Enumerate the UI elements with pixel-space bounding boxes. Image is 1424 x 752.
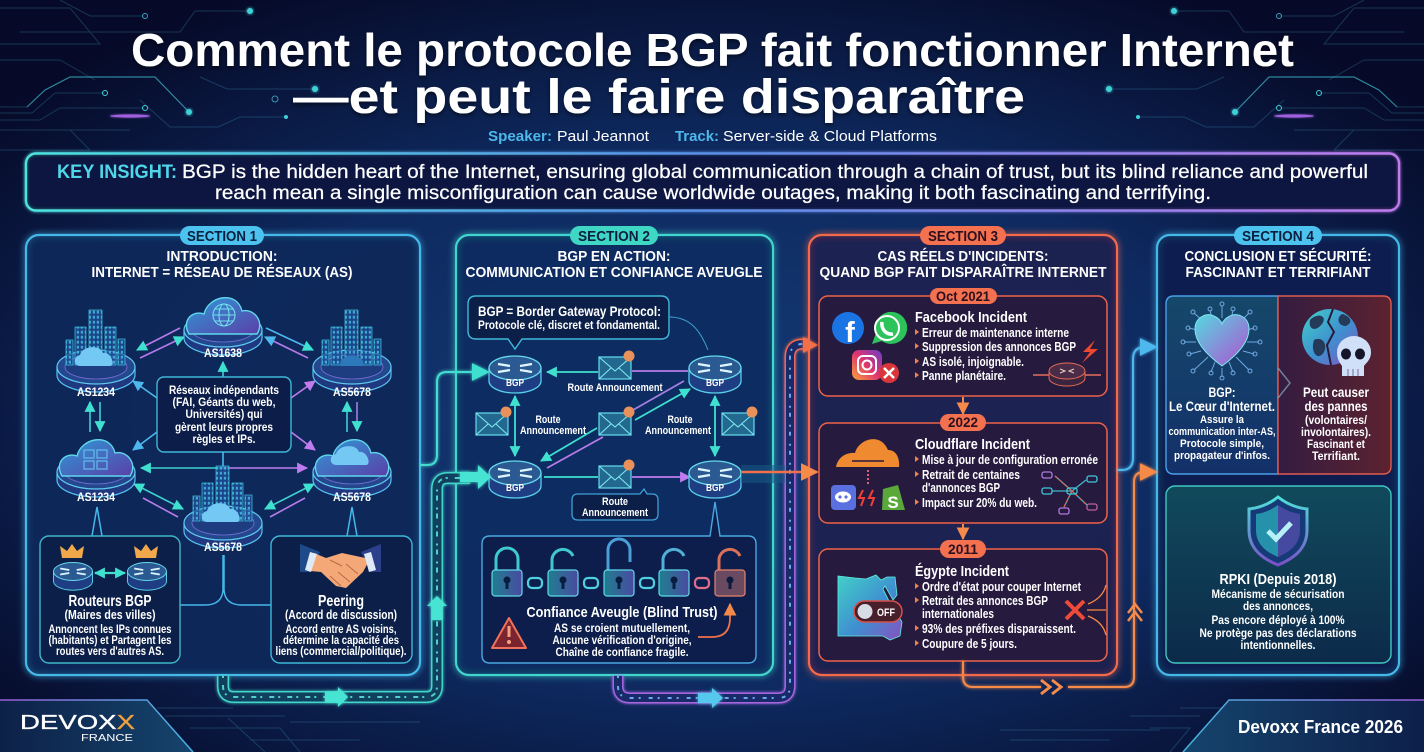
- card: RPKI: des annonces,: [1243, 599, 1313, 613]
- box: blind trust: [482, 502, 756, 663]
- center text box: [157, 377, 291, 452]
- card: RPKI: Ne protège pas des déclarations: [1200, 626, 1357, 640]
- footer: Devoxx France logo: [0, 700, 193, 752]
- text: outages: [1301, 385, 1371, 463]
- title: Comment le protocole BGP fait fonctionner Internet: [131, 24, 1294, 76]
- speaker and track: Server-side & Cloud Platforms: [723, 128, 937, 145]
- card: Cloudflare incident: Cloudflare Incident: [915, 436, 1030, 453]
- labels: route announcement: Route: [668, 414, 692, 426]
- box: routeurs BGP: Routeurs BGP: [68, 593, 152, 610]
- text: outages: des pannes: [1304, 399, 1368, 414]
- text: BGP heart: propagateur d'infos.: [1174, 450, 1270, 462]
- icon: facebook: f: [845, 317, 855, 349]
- bullets: [915, 580, 1082, 651]
- callout: BGP definition: BGP = Border Gateway Protocol:: [478, 303, 661, 319]
- node: AS5678 city: AS5678: [333, 385, 371, 399]
- panel: section 1: [26, 226, 420, 675]
- text: BGP heart: [1168, 385, 1276, 462]
- panel: section 4: [1157, 226, 1399, 675]
- router: top left: BGP: [506, 378, 524, 389]
- panel: section 3: [809, 226, 1117, 675]
- card: RPKI: Pas encore déployé à 100%: [1212, 613, 1345, 627]
- text: BGP heart: Protocole simple,: [1180, 438, 1264, 450]
- icon: failing router: [1033, 340, 1101, 386]
- box: routeurs BGP: (habitants) et Partagent les: [48, 635, 172, 647]
- box: routeurs BGP: [40, 536, 180, 663]
- icon: cracked globe with skull: [1302, 309, 1371, 376]
- center text box: gèrent leurs propres: [175, 422, 273, 434]
- key insight banner: [26, 154, 1399, 210]
- node: AS5678 bottom city: [184, 466, 262, 554]
- text: outages: involontaires).: [1301, 427, 1371, 439]
- arrow: section 3 to section 4, orange: [963, 472, 1156, 694]
- text: outages: Fascinant et: [1307, 439, 1365, 451]
- key insight banner: reach mean a single misconfiguration can cause worldwide outages, making it both fascinating and terrifying.: [215, 182, 1211, 204]
- section 1 heading: INTERNET = RÉSEAU DE RÉSEAUX (AS): [92, 264, 353, 281]
- labels: route announcement: [520, 382, 711, 437]
- bullets: internationales: [922, 607, 994, 621]
- callout: BGP definition: Protocole clé, discret et fondamental.: [478, 318, 660, 332]
- icon: discord, bolts, shopify: [831, 485, 905, 512]
- background circuit, left: [0, 0, 318, 150]
- icon: facebook: [832, 312, 864, 349]
- text: BGP heart: Assure la: [1200, 414, 1245, 426]
- text: outages: Peut causer: [1303, 385, 1370, 400]
- bullets: Suppression des annonces BGP: [922, 340, 1076, 354]
- footer: event name: [1183, 700, 1424, 752]
- node: AS5678 cloud: [313, 440, 391, 504]
- router: bottom right: BGP: [706, 483, 724, 494]
- labels: route announcement: Announcement: [645, 425, 711, 437]
- card: Facebook incident: Oct 2021: [936, 289, 990, 304]
- arrow: section 3 to section 4, blue: [1117, 347, 1156, 470]
- box: peering: [271, 536, 412, 663]
- box: routeurs BGP: routes vers d'autres AS.: [56, 646, 164, 658]
- section 3 heading: [820, 248, 1107, 281]
- text: BGP heart: communication inter-AS,: [1168, 426, 1276, 438]
- bullets: AS isolé, injoignable.: [922, 355, 1024, 369]
- speaker and track: Track:: [675, 128, 719, 145]
- card: Egypt incident: 2011: [948, 542, 978, 557]
- section 3 badge: SECTION 3: [928, 229, 998, 245]
- footer: event name: Devoxx France 2026: [1238, 717, 1403, 737]
- background circuit, right: [1106, 0, 1424, 150]
- box: peering: liens (commercial/politique).: [276, 646, 406, 658]
- arrow: card 2 to card 3: [962, 524, 964, 539]
- key insight banner: BGP is the hidden heart of the Internet, ensuring global communication through a chain of trust, but its blind reliance and powerful: [182, 161, 1368, 183]
- bullets: Ordre d'état pour couper Internet: [922, 580, 1082, 594]
- bullets: Coupure de 5 jours.: [922, 637, 1017, 651]
- center text box: Réseaux indépendants: [169, 385, 279, 397]
- icon: Egypt map with off switch: [838, 575, 902, 640]
- footer: Devoxx France logo: FRANCE: [81, 733, 133, 744]
- icon: chain of locks: [492, 539, 745, 596]
- labels: route announcement: Announcement: [520, 425, 586, 437]
- icon: shield with check: [1249, 497, 1307, 565]
- bullets: Retrait de centaines: [922, 468, 1020, 482]
- arrow: card 1 to card 2: [962, 397, 964, 414]
- icon: blocked routes X: [1066, 585, 1106, 635]
- card: RPKI: Mécanisme de sécurisation: [1212, 587, 1344, 601]
- center text box: (FAI, Géants du web,: [172, 397, 276, 409]
- box: peering: (Accord de discussion): [285, 607, 397, 622]
- box: blind trust: Chaîne de confiance fragile.: [556, 645, 688, 659]
- section 4 heading: CONCLUSION ET SÉCURITÉ:: [1184, 248, 1372, 265]
- key insight banner: KEY INSIGHT:: [57, 161, 177, 183]
- callout: route announcement: [572, 489, 658, 520]
- box: blind trust: Confiance Aveugle (Blind Trust): [526, 604, 718, 621]
- title: [131, 24, 1294, 124]
- section 1 badge: SECTION 1: [187, 229, 257, 245]
- network arrows: [90, 328, 357, 517]
- card: Cloudflare incident: [819, 414, 1107, 523]
- bullets: Erreur de maintenance interne: [922, 326, 1069, 340]
- section 1 heading: [92, 249, 353, 281]
- card: Cloudflare incident: 2022: [948, 415, 978, 430]
- footer: Devoxx France logo: DEVOX X: [20, 712, 135, 734]
- section 2 badge: SECTION 2: [578, 229, 650, 245]
- icon: instagram with cross: [852, 350, 899, 383]
- bullets: 93% des préfixes disparaissent.: [922, 622, 1076, 636]
- card: Egypt incident: [819, 540, 1107, 661]
- node: AS1234 cloud: AS1234: [77, 490, 115, 504]
- text: outages: Terrifiant.: [1312, 451, 1360, 463]
- icon: network diagram: [1042, 472, 1097, 514]
- bullets: Impact sur 20% du web.: [922, 496, 1037, 510]
- card: RPKI: RPKI (Depuis 2018): [1220, 571, 1336, 588]
- section 2 heading: COMMUNICATION ET CONFIANCE AVEUGLE: [466, 265, 763, 281]
- node: AS1234 city: [57, 310, 135, 399]
- bullets: Mise à jour de configuration erronée: [922, 453, 1098, 467]
- card: Egypt incident: Égypte Incident: [915, 563, 1009, 580]
- router: top right: [689, 356, 741, 393]
- box: peering: Accord entre AS voisins,: [286, 624, 396, 636]
- section 2 heading: [466, 249, 763, 281]
- speaker and track: Paul Jeannot: [557, 128, 650, 145]
- node: AS1638 cloud: [184, 298, 262, 360]
- bullets: [915, 326, 1076, 383]
- box: peering: détermine la capacité des: [283, 635, 399, 647]
- icon: cloudflare cloud: [836, 439, 899, 486]
- icon: two routers with crowns: [54, 544, 166, 590]
- card: RPKI: intentionnelles.: [1240, 638, 1316, 652]
- section 1 heading: INTRODUCTION:: [166, 249, 278, 265]
- section 2 heading: BGP EN ACTION:: [558, 249, 670, 265]
- box: blind trust: Aucune vérification d'origine,: [552, 633, 692, 647]
- section 3 heading: QUAND BGP FAIT DISPARAÎTRE INTERNET: [820, 263, 1107, 281]
- bullets: Panne planétaire.: [922, 369, 1006, 383]
- speaker and track: [488, 128, 937, 145]
- text: BGP heart: BGP:: [1208, 385, 1236, 400]
- icon: discord, bolts, shopify: S: [887, 493, 899, 512]
- router: top left: [489, 356, 541, 393]
- icon: heart with nodes: [1181, 302, 1262, 380]
- icon: whatsapp: [872, 312, 907, 344]
- icon: handshake: [300, 544, 381, 588]
- card: heart and outage comparison: [1166, 296, 1391, 474]
- node: AS1638 cloud: AS1638: [204, 346, 242, 360]
- router: bottom right: [689, 461, 741, 498]
- callout: route announcement: Route: [602, 496, 628, 508]
- icon: Egypt map with off switch: OFF: [877, 607, 895, 619]
- text: BGP heart: Le Cœur d'Internet.: [1169, 399, 1275, 414]
- node: AS5678 cloud: AS5678: [333, 490, 371, 504]
- bullets: d'annonces BGP: [922, 481, 1000, 495]
- panel: section 2: [456, 226, 773, 675]
- arrow: section 2 to section 3 conduit: [618, 337, 818, 708]
- card: Facebook incident: [819, 288, 1107, 396]
- box: routeurs BGP: (Maires des villes): [64, 607, 156, 622]
- arrow: section 1 to section 2, teal conduit: [223, 465, 491, 707]
- card: RPKI: [1166, 486, 1391, 663]
- text: outages: (volontaires/: [1305, 415, 1368, 427]
- callout: route announcement: Announcement: [582, 507, 648, 519]
- callout: BGP definition: [468, 296, 669, 349]
- node: AS1234 city: AS1234: [77, 385, 115, 399]
- title: —et peut le faire disparaître: [293, 71, 1025, 124]
- icon: envelopes: [476, 350, 758, 488]
- router: bottom left: BGP: [506, 483, 524, 494]
- section 4 heading: [1184, 248, 1372, 281]
- router: bottom left: [489, 461, 541, 498]
- box: routeurs BGP: Annoncent les IPs connues: [48, 624, 172, 636]
- background circuit, bottom: [157, 708, 1240, 752]
- node: AS5678 bottom city: AS5678: [204, 540, 242, 554]
- box: peering: Peering: [318, 593, 364, 610]
- node: AS5678 city: [313, 310, 391, 399]
- bullets: [915, 453, 1098, 510]
- route announcement arrows: [515, 371, 715, 477]
- card: Facebook incident: Facebook Incident: [915, 309, 1027, 326]
- arrow: to broken lock: [698, 604, 730, 637]
- box: blind trust: AS se croient mutuellement,: [554, 621, 690, 635]
- labels: route announcement: Route Announcement: [568, 382, 663, 394]
- center text box: Universités) qui: [186, 409, 262, 421]
- section 4 badge: SECTION 4: [1242, 229, 1314, 245]
- section 4 heading: FASCINANT ET TERRIFIANT: [1186, 265, 1371, 281]
- speaker and track: Speaker:: [488, 128, 552, 145]
- icon: warning triangle: [492, 618, 526, 648]
- section 3 heading: CAS RÉELS D'INCIDENTS:: [878, 248, 1048, 265]
- router: top right: BGP: [706, 378, 724, 389]
- center text box: règles et IPs.: [192, 434, 256, 446]
- connectors to detail boxes: [92, 507, 357, 605]
- bullets: Retrait des annonces BGP: [922, 594, 1048, 608]
- arrow: section 1 to router: [420, 372, 488, 465]
- node: AS1234 cloud: [57, 440, 135, 504]
- labels: route announcement: Route: [536, 414, 560, 426]
